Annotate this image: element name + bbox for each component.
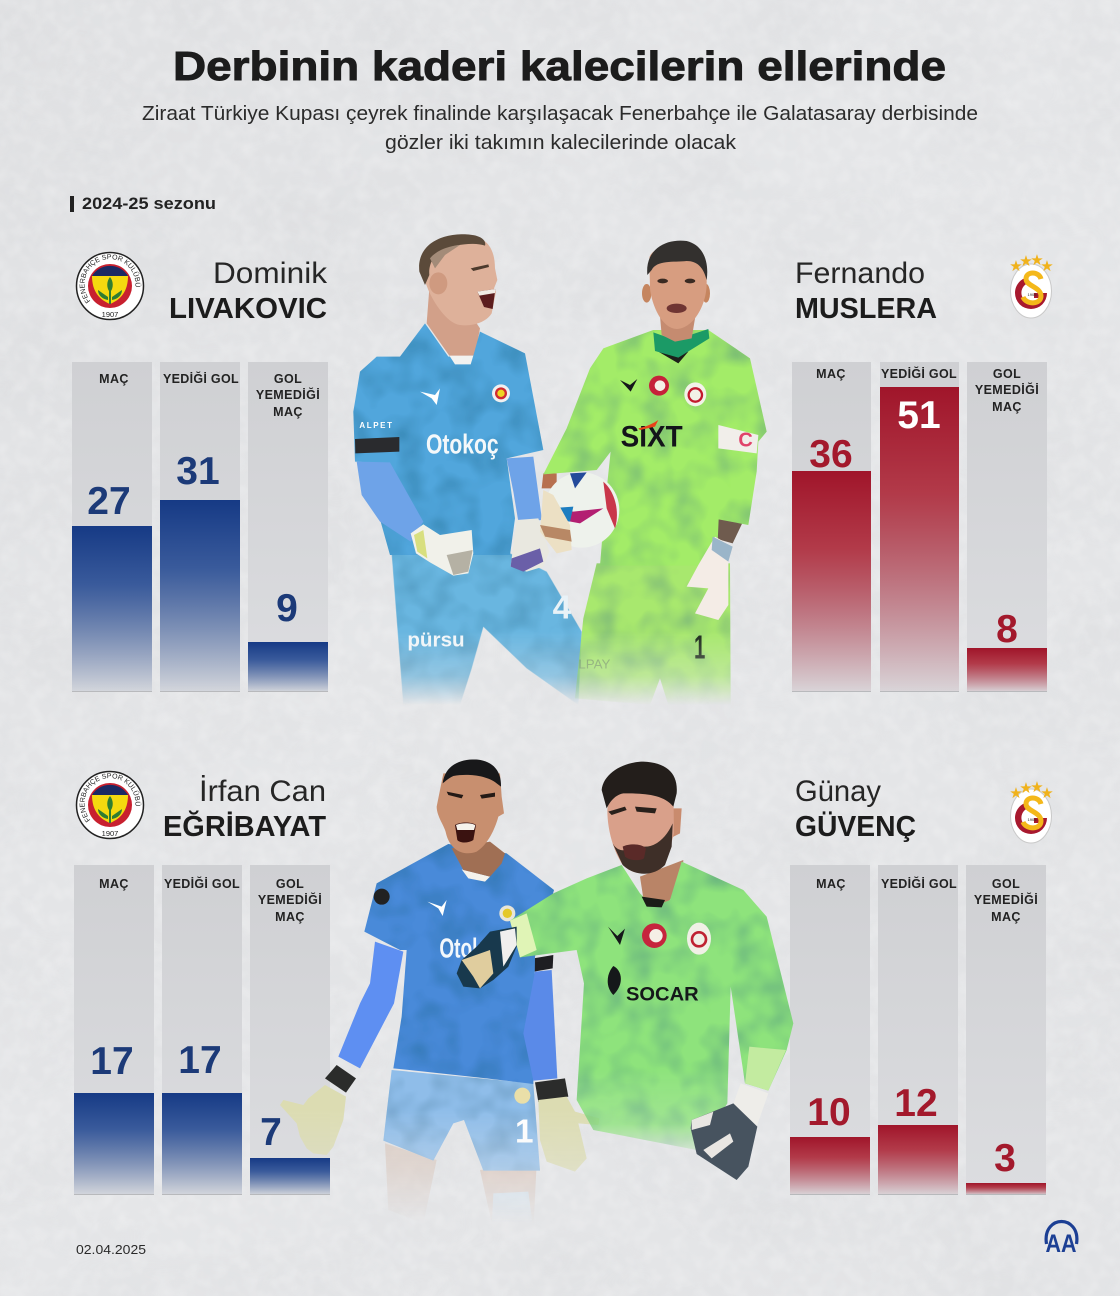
logo: Fenerbahçe bottom: FENERBAHÇE SPOR KULÜBÜ [80, 773, 142, 822]
subtitle: Ziraat Türkiye Kupası çeyrek finalinde karşılaşacak Fenerbahçe ile Galatasaray derbisinde [142, 103, 978, 125]
name: Fernando Muslera: Fernando [795, 257, 925, 290]
bar chart: Eğribayat: YEMEDİĞİ [258, 892, 322, 907]
logo: Galatasaray bottom: ★ [1019, 780, 1033, 797]
bar chart: Eğribayat [74, 865, 330, 1195]
bar chart: Muslera: YEMEDİĞİ [975, 382, 1039, 397]
date: 02.04.2025 [76, 1243, 146, 1257]
player: Muslera: SIXT [621, 420, 683, 453]
name: Dominik Livakovic: Dominik [213, 257, 328, 290]
logo: Anadolu Agency: AA [1046, 1230, 1076, 1258]
name: Fernando Muslera [795, 257, 937, 325]
player: Muslera: LPAY [578, 656, 611, 671]
logo: Galatasaray top [1009, 252, 1054, 318]
name: İrfan Can Eğribayat [163, 775, 326, 843]
bar chart: Muslera: MAÇ [992, 400, 1022, 414]
bar chart: Eğribayat: 17 [178, 1039, 222, 1082]
bar chart: Güvenç: GOL [992, 877, 1020, 891]
player: Muslera: 1 [694, 629, 705, 666]
bar chart: Eğribayat: GOL [276, 877, 304, 891]
bar chart: Muslera [792, 362, 1047, 692]
logo: Fenerbahçe bottom [76, 770, 144, 840]
logo: Galatasaray bottom [1009, 779, 1054, 843]
player: Livakovic: ALPET [359, 421, 392, 430]
logo: Galatasaray top: ★ [1040, 258, 1054, 275]
logo: Galatasaray bottom: ★ [1009, 785, 1023, 802]
name: Dominik Livakovic: LIVAKOVIC [169, 293, 327, 325]
bar chart: Eğribayat: 17 [90, 1040, 134, 1083]
name: Dominik Livakovic [169, 257, 328, 325]
bar chart: Güvenç: YEMEDİĞİ [974, 892, 1038, 907]
player: Livakovic [353, 234, 582, 705]
logo: Galatasaray top: ★ [1030, 252, 1044, 269]
logo: Galatasaray bottom: 1905 [1028, 817, 1037, 822]
logo: Fenerbahçe top: FENERBAHÇE SPOR KULÜBÜ [80, 254, 142, 304]
name: Fernando Muslera: MUSLERA [795, 293, 937, 325]
subtitle [142, 103, 978, 154]
bar chart: Livakovic: MAÇ [99, 372, 129, 386]
bar chart: Güvenç: MAÇ [991, 910, 1021, 924]
player: Eğribayat: Otok [439, 932, 483, 963]
logo: Fenerbahçe top [76, 252, 144, 320]
logo: Galatasaray bottom: ★ [1030, 779, 1044, 796]
logo: Galatasaray top: ★ [1019, 253, 1033, 270]
player: Eğribayat [280, 759, 599, 1230]
logo: Galatasaray bottom: ★ [1040, 785, 1054, 802]
bar chart: Güvenç: 3 [994, 1137, 1016, 1180]
bar chart: Muslera: 36 [809, 433, 853, 476]
bar chart: Eğribayat: MAÇ [99, 877, 129, 891]
player: Muslera: C [738, 429, 753, 451]
bar chart: Muslera: 51 [897, 394, 941, 437]
bar chart: Eğribayat: MAÇ [275, 910, 305, 924]
name: Günay Güvenç: GÜVENÇ [795, 810, 916, 843]
logo: Fenerbahçe bottom: 1907 [102, 829, 118, 838]
bar chart: Muslera: GOL [993, 367, 1021, 381]
logo: Galatasaray top: ★ [1009, 258, 1023, 275]
bar chart: Muslera: 8 [996, 608, 1018, 651]
bar chart: Livakovic: YEMEDİĞİ [256, 387, 320, 402]
title: Derbinin kaderi kalecilerin ellerinde [173, 43, 946, 89]
player: Muslera [540, 241, 767, 705]
bar chart: Livakovic [72, 362, 328, 692]
bar chart: Livakovic: YEDİĞİ GOL [163, 371, 239, 386]
player: Güvenç [457, 762, 793, 1180]
player: Livakovic: Otokoç [426, 428, 499, 459]
player: Eğribayat: 1 [515, 1114, 534, 1151]
player: Livakovic: pürsu [407, 629, 465, 652]
bar chart: Livakovic: 27 [87, 480, 131, 523]
bar chart: Livakovic: 9 [276, 587, 298, 630]
bar chart: Güvenç: 10 [807, 1091, 851, 1134]
season label: 2024-25 sezonu [82, 195, 216, 213]
bar chart: Muslera: MAÇ [816, 367, 846, 381]
bar chart: Güvenç: MAÇ [816, 877, 846, 891]
bar chart: Güvenç: 12 [894, 1082, 938, 1125]
bar chart: Livakovic: GOL [274, 372, 302, 386]
bar chart: Muslera: YEDİĞİ GOL [881, 366, 957, 381]
player: Livakovic: 4 [553, 589, 572, 626]
logo: Galatasaray top: 1905 [1028, 292, 1037, 297]
logo: Fenerbahçe top: 1907 [102, 310, 118, 319]
bar chart: Eğribayat: 7 [260, 1111, 282, 1154]
bar chart: Güvenç [790, 865, 1046, 1195]
bar chart: Güvenç: YEDİĞİ GOL [881, 876, 957, 891]
name: Günay Güvenç [795, 775, 916, 843]
subtitle: gözler iki takımın kalecilerinde olacak [385, 132, 737, 154]
bar chart: Livakovic: MAÇ [273, 405, 303, 419]
name: İrfan Can Eğribayat: İrfan Can [199, 775, 326, 808]
bar chart: Livakovic: 31 [176, 450, 220, 493]
bar chart: Eğribayat: YEDİĞİ GOL [164, 876, 240, 891]
name: İrfan Can Eğribayat: EĞRİBAYAT [163, 809, 326, 843]
logo: Anadolu Agency [1046, 1222, 1077, 1258]
player: Güvenç: SOCAR [626, 985, 699, 1006]
name: Günay Güvenç: Günay [795, 775, 881, 808]
